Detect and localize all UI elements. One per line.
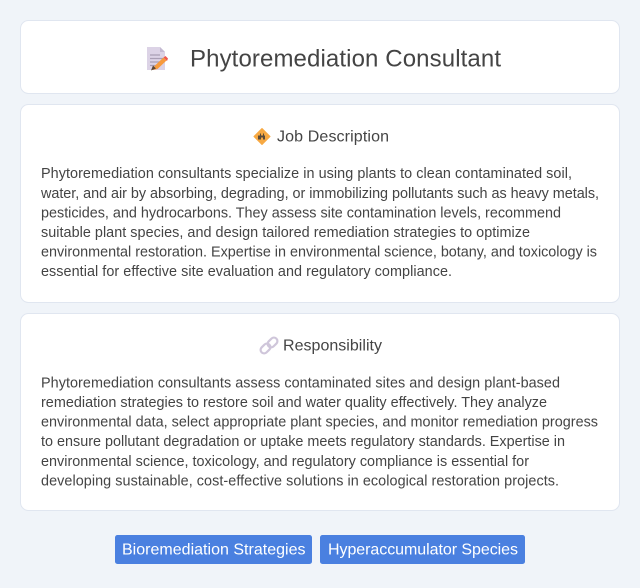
icon: chain link (259, 336, 279, 355)
icon: construction diamond (254, 128, 270, 144)
title: Phytoremediation Consultant (190, 45, 501, 72)
panel: job description (20, 104, 620, 302)
button: bioremediation strategies (115, 535, 312, 564)
text block: responsibility: developing sustainable, cost-effective solutions in ecological restoration projects. (41, 473, 559, 489)
button: hyperaccumulator species: Hyperaccumulator Species (328, 541, 518, 558)
text block: responsibility: to ensure pollutant degradation or uptake meets regulatory standards. Expertise in (41, 434, 565, 450)
text block: responsibility (41, 375, 598, 489)
text block: responsibility: Phytoremediation consultants assess contaminated sites and design plant-based (41, 375, 560, 391)
panel: title card (20, 20, 620, 94)
text block: job description (40, 166, 599, 280)
heading: job description: Job Description (277, 128, 389, 145)
heading: responsibility: Responsibility (283, 337, 382, 354)
panel: responsibility (20, 314, 620, 510)
icon: memo with pencil (147, 47, 168, 70)
text block: job description: environmental restoration. Expertise in environmental science, botany, and toxicology is (41, 245, 597, 261)
text block: job description: essential for effective site evaluation and regulatory compliance. (41, 264, 452, 280)
text block: responsibility: environmental science, toxicology, and regulatory compliance is essential for (41, 454, 529, 470)
text block: job description: water, and air by absorbing, degrading, or immobilizing pollutants such as heavy metals, (40, 186, 599, 202)
text block: job description: pesticides, and hydrocarbons. They assess site contamination levels, recommend (41, 205, 561, 221)
button: bioremediation strategies: Bioremediation Strategies (122, 541, 306, 558)
text block: responsibility: environmental data, select appropriate plant species, and monitor remediation progress (41, 415, 598, 431)
button: hyperaccumulator species (320, 535, 525, 564)
text block: job description: suitable plant species, and design tailored remediation strategies to optimize (41, 225, 530, 241)
text block: responsibility: remediation strategies to restore soil and water quality effectively. They analyze (41, 395, 547, 411)
text block: job description: Phytoremediation consultants specialize in using plants to clean contaminated soil, (41, 166, 572, 182)
